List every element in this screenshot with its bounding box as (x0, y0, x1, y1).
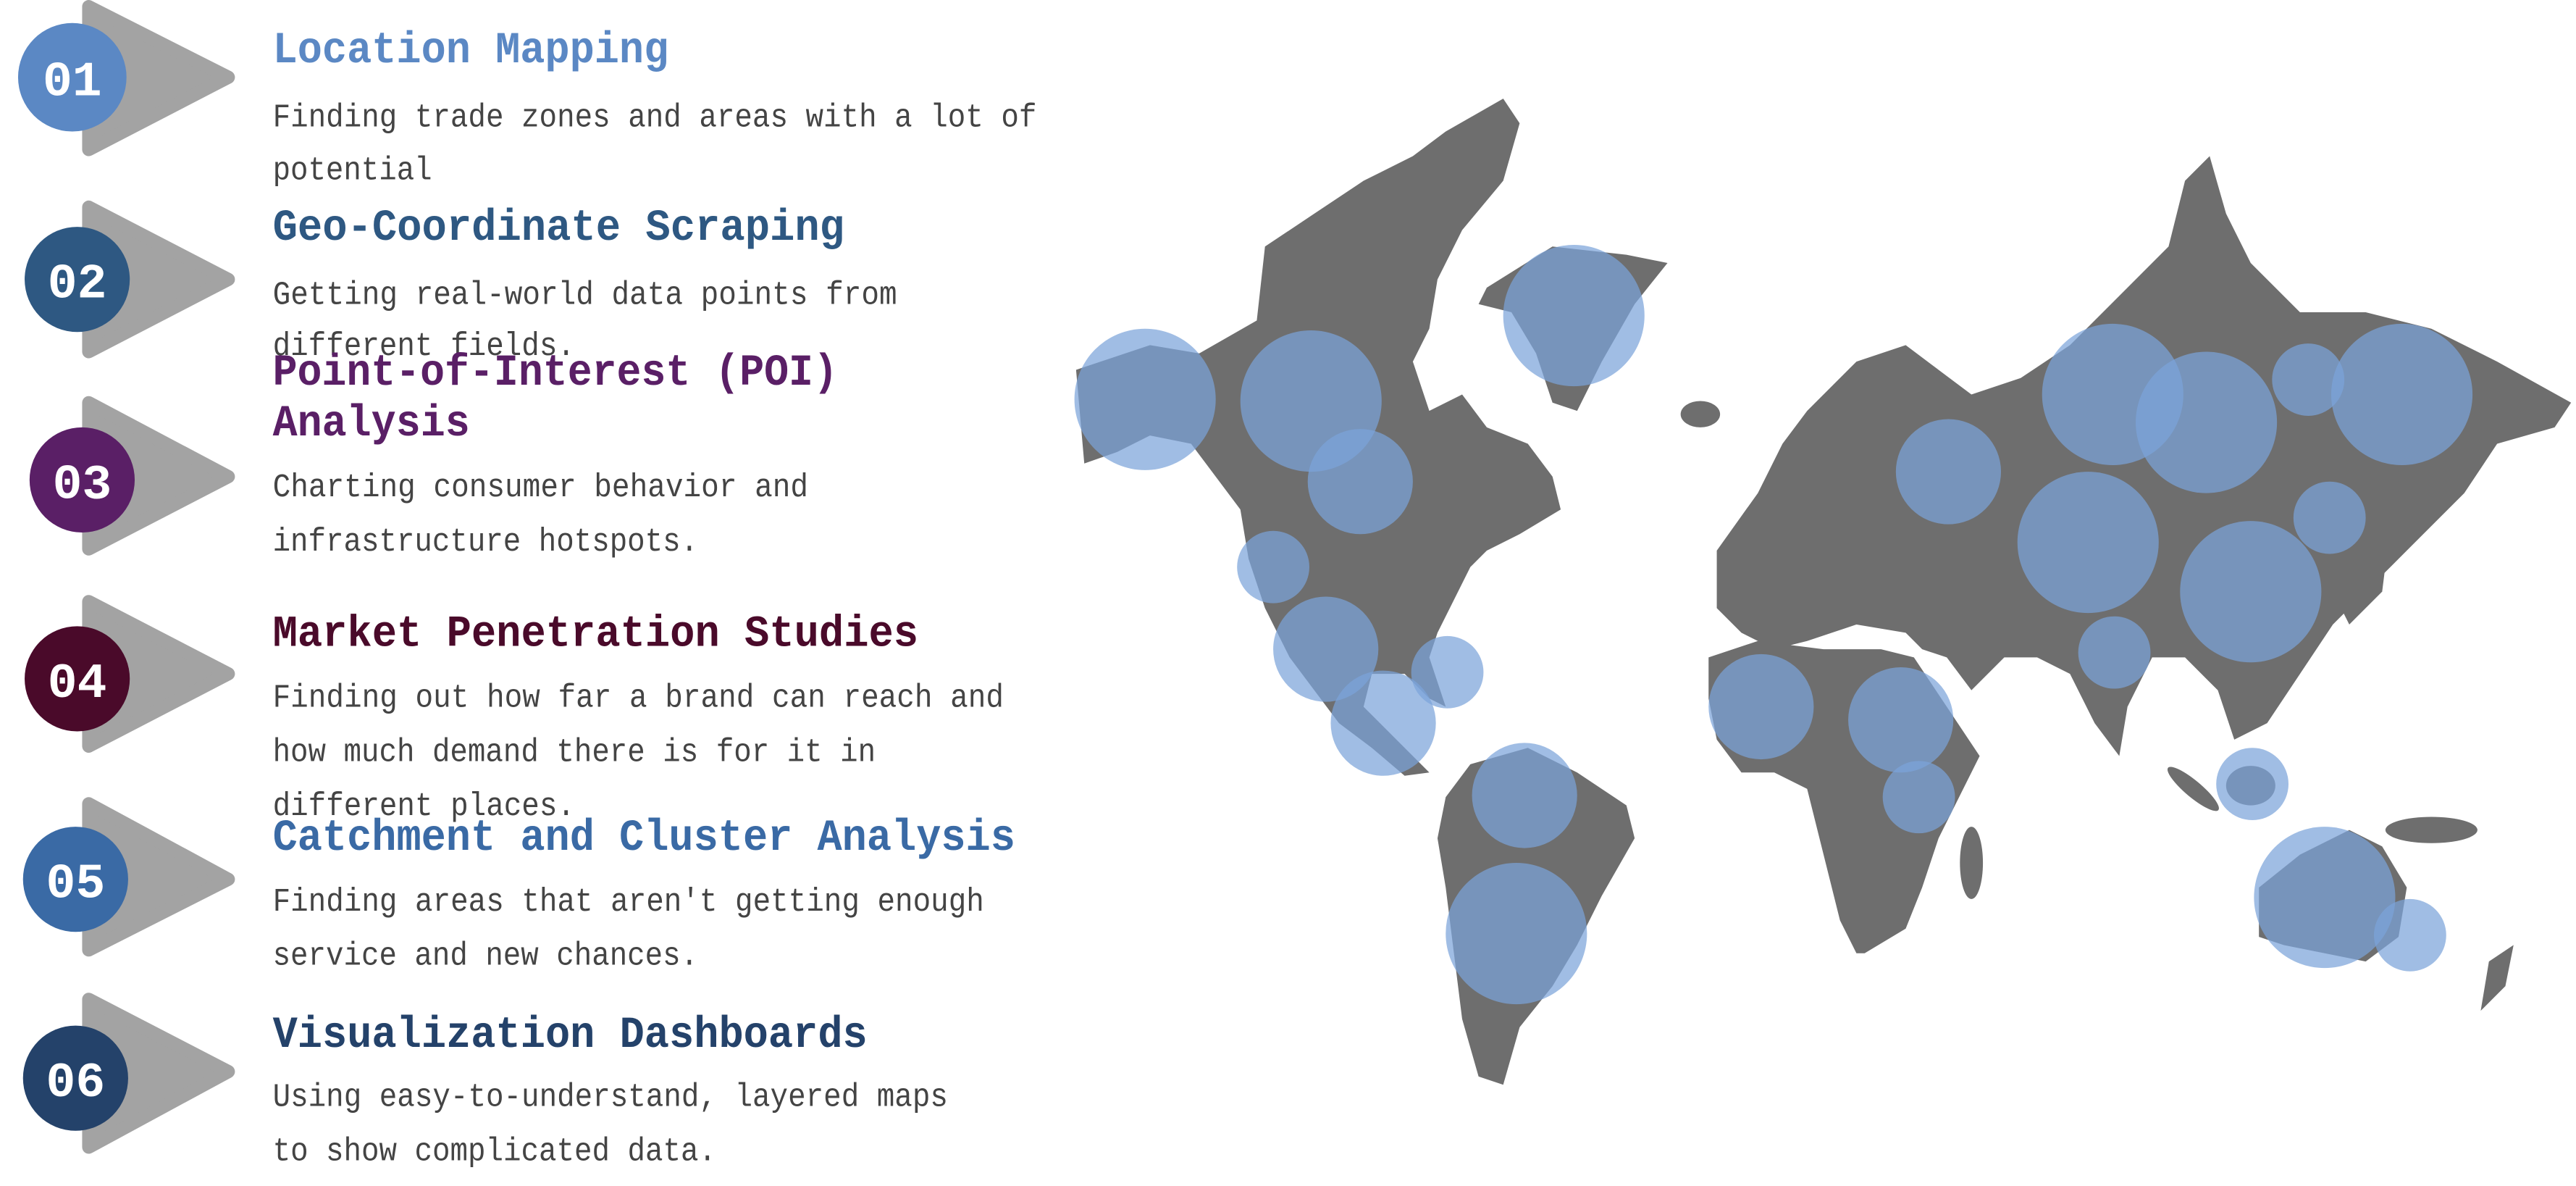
step 04 (25, 601, 1004, 825)
step 01 (18, 7, 1036, 189)
badge 02 (25, 227, 130, 332)
arrow 02 (88, 207, 228, 351)
description 06 (273, 1079, 948, 1171)
badge 01 (18, 23, 127, 132)
badge 01: 01 (43, 55, 102, 111)
description 05: Finding areas that aren't getting enough (273, 883, 984, 921)
step 02 (25, 204, 897, 365)
title 05: Catchment and Cluster Analysis (273, 814, 1015, 864)
badge 04 (25, 626, 130, 732)
arrow 01 (88, 7, 228, 149)
badge 05 (23, 827, 128, 932)
continents (1076, 99, 2571, 1085)
title 02: Geo-Coordinate Scraping (273, 204, 844, 254)
description 04 (273, 679, 1004, 825)
world map (1075, 99, 2571, 1085)
step 05 (23, 803, 1015, 975)
description 04: different places. (273, 788, 575, 825)
description 04: how much demand there is for it in (273, 733, 876, 771)
description 04: Finding out how far a brand can reach and (273, 679, 1004, 717)
badge 05: 05 (46, 857, 105, 913)
badge 03: 03 (53, 457, 112, 513)
title 06: Visualization Dashboards (273, 1011, 868, 1061)
description 05 (273, 883, 984, 975)
badge 06: 06 (46, 1056, 105, 1111)
title 03: Analysis (273, 399, 470, 449)
description 06: Using easy-to-understand, layered maps (273, 1079, 948, 1116)
step 03 (30, 348, 838, 561)
description 02: different fields. (273, 327, 575, 365)
description 06: to show complicated data. (273, 1133, 716, 1171)
description 03: infrastructure hotspots. (273, 523, 698, 561)
description 03: Charting consumer behavior and (273, 469, 808, 506)
arrow 04 (88, 601, 228, 746)
description 01 (273, 99, 1036, 189)
badge 06 (23, 1026, 128, 1131)
description 03 (273, 469, 808, 561)
arrow 06 (88, 999, 228, 1147)
arrow 05 (88, 803, 228, 950)
description 02 (273, 277, 897, 365)
arrow 03 (88, 403, 228, 549)
title 04: Market Penetration Studies (273, 610, 918, 660)
title 01: Location Mapping (273, 26, 668, 76)
description 05: service and new chances. (273, 937, 698, 975)
title 03 (273, 348, 838, 449)
badge 04: 04 (48, 656, 106, 712)
title 03: Point-of-Interest (POI) (273, 348, 838, 398)
description 01: potential (273, 151, 432, 189)
step 06 (23, 999, 948, 1171)
data bubbles (1075, 245, 2472, 1004)
description 02: Getting real-world data points from (273, 277, 897, 314)
description 01: Finding trade zones and areas with a lot of (273, 99, 1036, 137)
badge 02: 02 (48, 257, 106, 313)
badge 03 (30, 427, 135, 533)
